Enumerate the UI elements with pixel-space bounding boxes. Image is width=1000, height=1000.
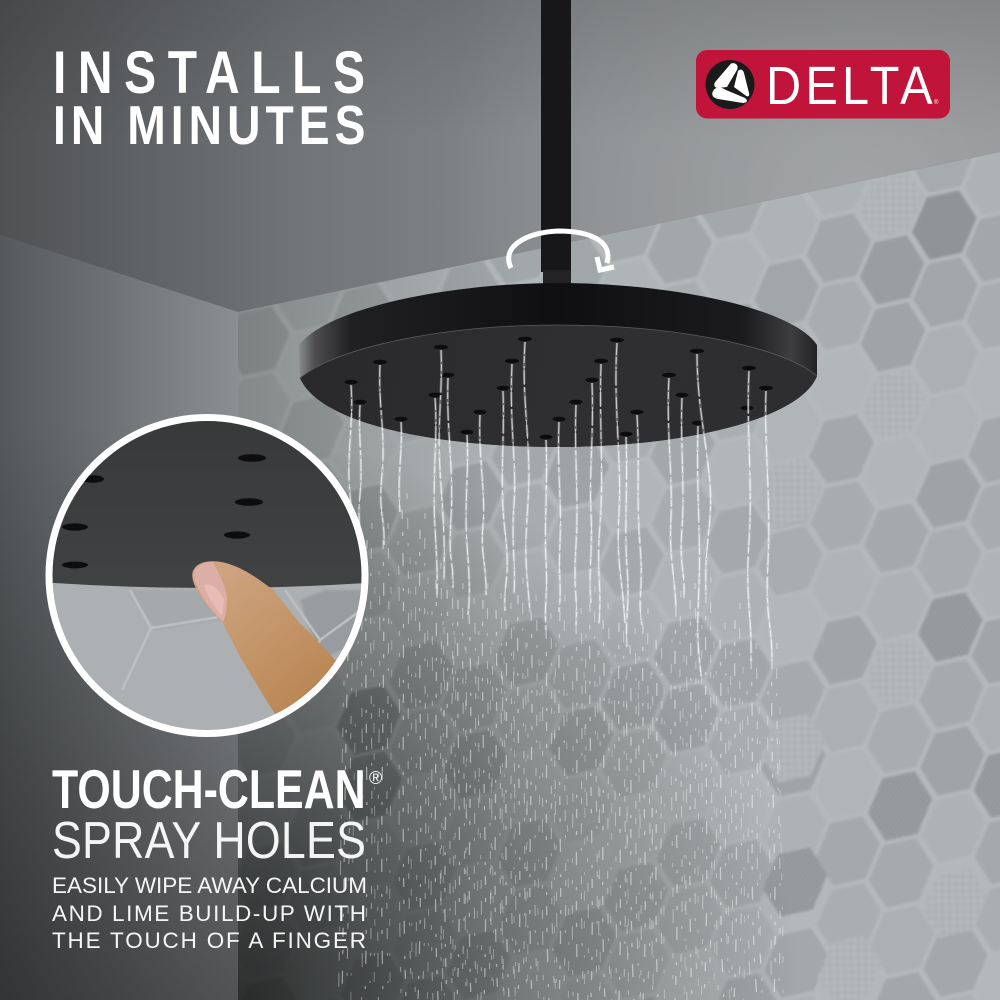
- shower arm: [541, 0, 571, 285]
- heading: touch-clean spray holes: ®: [369, 768, 382, 788]
- spray holes: [344, 337, 773, 439]
- text block: description: THE TOUCH OF A FINGER: [52, 928, 366, 953]
- text block: description: AND LIME BUILD-UP WITH: [52, 901, 366, 926]
- heading: installs in minutes: IN MINUTES: [53, 94, 365, 156]
- heading: touch-clean spray holes: TOUCH-CLEAN: [52, 759, 366, 820]
- heading: touch-clean spray holes: [52, 759, 382, 870]
- text block: description: EASILY WIPE AWAY CALCIUM: [52, 873, 367, 898]
- water spray streams: [335, 335, 795, 1000]
- logo: delta: [696, 50, 950, 118]
- heading: installs in minutes: INSTALLS: [53, 39, 365, 106]
- background: left wall: [0, 235, 238, 1000]
- close-up tile background: [52, 580, 362, 730]
- background: tiled hexagon wall: [238, 150, 1000, 1000]
- fingernail: [194, 562, 227, 622]
- logo: delta: DELTA: [766, 55, 933, 116]
- heading: touch-clean spray holes: SPRAY HOLES: [52, 812, 366, 870]
- close-up shower plate: [52, 421, 362, 588]
- background: ceiling: [0, 0, 1000, 312]
- logo: delta: ®: [934, 99, 939, 106]
- finger: [192, 561, 340, 718]
- delta triangle mark: [712, 63, 749, 103]
- heading: installs in minutes: [53, 39, 365, 156]
- text block: description: [52, 873, 367, 953]
- close-up spray holes: [62, 454, 266, 568]
- callout circle: touch-clean close-up: [40, 400, 380, 740]
- rotation arrow: [509, 231, 614, 270]
- round shower head: [299, 283, 817, 447]
